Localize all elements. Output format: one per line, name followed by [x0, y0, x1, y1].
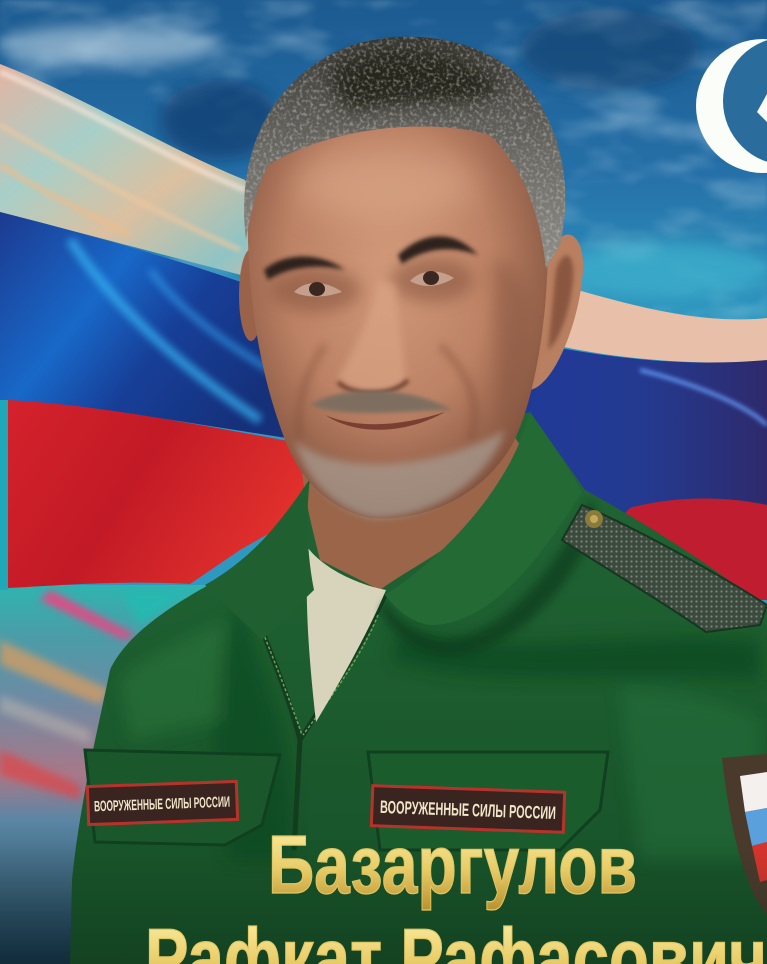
lower rainbow waves	[0, 585, 300, 964]
collar left	[205, 478, 314, 640]
facial features	[264, 149, 530, 518]
eyes	[294, 283, 342, 296]
zipper	[250, 595, 385, 850]
left pocket and badge	[85, 750, 280, 845]
name: surname: Базаргулов	[268, 818, 637, 911]
flag left: edge	[0, 400, 8, 590]
ears	[239, 235, 583, 390]
flag left: red stripe	[8, 400, 310, 588]
neck	[300, 430, 530, 590]
collar shadow	[380, 500, 600, 655]
eye shadows	[271, 268, 361, 312]
right pocket and badge: ВООРУЖЕННЫЕ СИЛЫ РОССИИ	[380, 797, 556, 823]
collar right	[385, 412, 582, 625]
cheek shadow	[490, 260, 530, 430]
bottom fade	[0, 840, 767, 964]
forehead highlight	[295, 149, 475, 221]
flag left: fold highlights	[0, 72, 245, 250]
hair	[244, 36, 566, 268]
face	[248, 105, 548, 518]
mouth	[325, 412, 445, 430]
nose	[338, 280, 405, 393]
right pocket and badge	[368, 752, 608, 850]
uniform shading	[120, 600, 760, 860]
goatee and beard	[295, 430, 505, 518]
sleeve patch	[722, 754, 767, 915]
flag left: blue stripe	[0, 212, 300, 440]
eyebrows	[264, 256, 345, 280]
smile lines	[299, 345, 475, 440]
flag right: stripes	[520, 285, 767, 600]
grey hair texture	[244, 36, 566, 268]
flag left: white stripe	[0, 64, 300, 290]
crescent and star emblem	[696, 37, 767, 173]
dark hair top	[330, 49, 500, 110]
t-shirt	[307, 548, 386, 722]
flag left: blue highlight	[70, 240, 270, 420]
left pocket and badge: ВООРУЖЕННЫЕ СИЛЫ РОССИИ	[94, 794, 230, 815]
body: green uniform	[70, 412, 767, 964]
sky background	[0, 0, 767, 610]
epaulette	[562, 505, 767, 632]
moustache	[310, 391, 452, 413]
